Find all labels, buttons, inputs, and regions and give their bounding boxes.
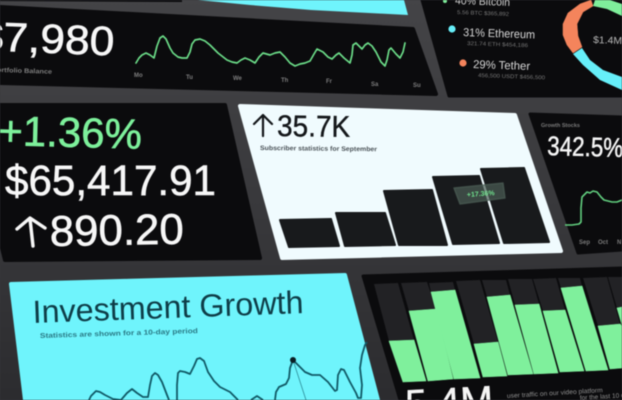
axis labels: months — [579, 240, 621, 246]
axis labels: weekdays: Sa — [371, 82, 379, 88]
axis labels: weekdays: Su — [413, 83, 421, 89]
text: period subtitle: Statistics are shown for a 10-day period — [40, 328, 198, 340]
bar chart: slots — [374, 277, 622, 344]
panel: top-left fragment — [0, 0, 182, 2]
legend: crypto list: 5.56 BTC $365,892 — [457, 10, 509, 18]
callout: +17.36%: +17.36% — [467, 190, 496, 199]
legend: crypto list: 29% Tether — [473, 59, 530, 73]
bar chart: subscribers — [280, 168, 549, 247]
legend: crypto list — [443, 0, 545, 81]
line chart: investment — [89, 342, 367, 400]
value: gain: 890.20 — [49, 206, 184, 256]
panel: investment growth — [11, 275, 378, 400]
icon: up arrow — [17, 218, 45, 246]
axis labels: months: Sep — [579, 240, 590, 246]
panel: subscriber statistics — [240, 106, 561, 258]
title: Investment Growth — [32, 284, 304, 330]
panel: crypto allocation — [422, 0, 622, 96]
panel: growth stocks — [530, 114, 622, 253]
text: traffic description: user traffic on our video platform — [507, 387, 603, 400]
legend: crypto list: 31% Ethereum — [463, 27, 535, 42]
line chart: growth — [565, 191, 622, 225]
legend: crypto list: 456,500 USDT $456,500 — [478, 73, 545, 81]
donut chart: $1.4M — [593, 35, 622, 47]
panel: traffic bars — [363, 268, 622, 400]
callout: +17.36% — [454, 183, 505, 204]
axis labels: weekdays: Fr — [326, 79, 333, 85]
donut chart — [563, 0, 622, 90]
axis labels: weekdays: Mo — [134, 73, 143, 79]
label: growth stocks: Growth Stocks — [541, 123, 580, 129]
legend: crypto list: 321.74 ETH $454,186 — [467, 41, 528, 49]
line chart: weekly balance — [136, 36, 405, 66]
panel: daily change — [0, 105, 260, 260]
value: percent change: +1.36% — [0, 107, 143, 158]
axis labels: weekdays: We — [233, 76, 243, 82]
axis labels: months: N — [617, 240, 621, 246]
value: subscribers: 35.7K — [277, 110, 350, 144]
text: subscriber subtitle: Subscriber statistics for September — [260, 145, 378, 153]
panel: top cyan fragment — [198, 0, 408, 15]
icon: up arrow — [254, 115, 272, 136]
axis labels: months: Oct — [598, 240, 608, 246]
axis labels: weekdays — [134, 73, 421, 89]
axis labels: weekdays: Th — [281, 78, 289, 84]
bar chart: green bars — [389, 286, 622, 382]
value: total dollars: $65,417.91 — [5, 157, 216, 205]
axis labels: weekdays: Tu — [186, 75, 193, 81]
panel: portfolio balance — [0, 7, 436, 94]
